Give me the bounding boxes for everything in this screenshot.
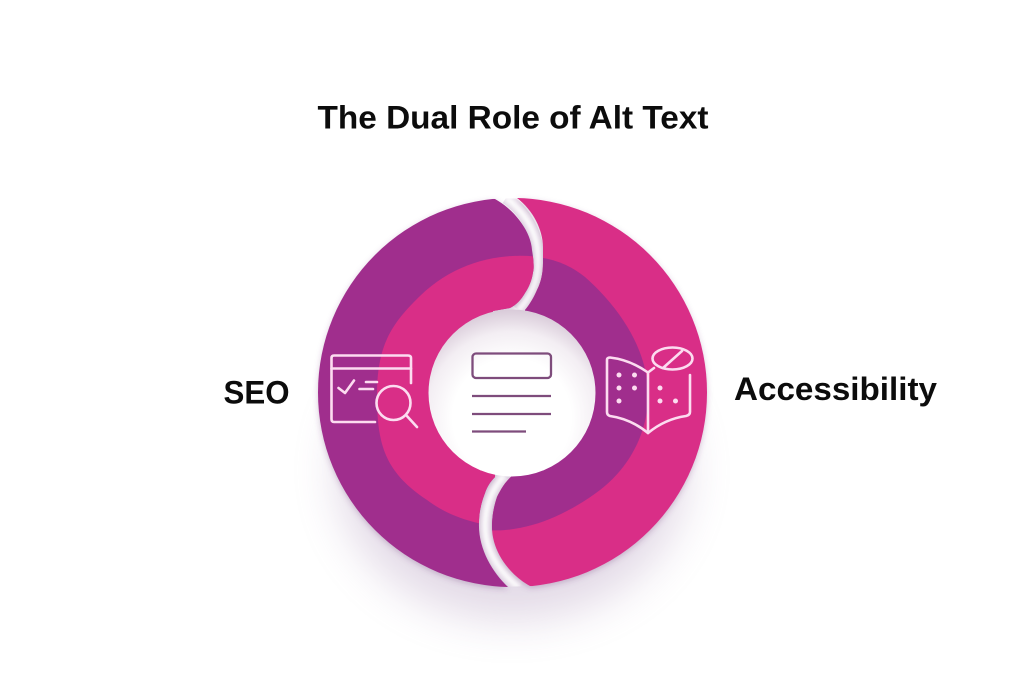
icon: browser window with magnifier bbox=[332, 356, 417, 427]
segment: SEO (left) bbox=[314, 198, 537, 592]
segment: Accessibility (right) bbox=[489, 197, 710, 591]
ground shadow bbox=[337, 320, 687, 620]
gap channels bbox=[485, 198, 538, 587]
ring diagram bbox=[318, 198, 707, 587]
icon: document in centre bbox=[472, 354, 551, 432]
title: The Dual Role of Alt Text bbox=[318, 100, 709, 136]
centre hole bbox=[428, 310, 596, 476]
label: SEO: SEO bbox=[224, 374, 290, 410]
icon: open book with eye bbox=[607, 348, 692, 433]
label: Accessibility: Accessibility bbox=[734, 371, 937, 407]
